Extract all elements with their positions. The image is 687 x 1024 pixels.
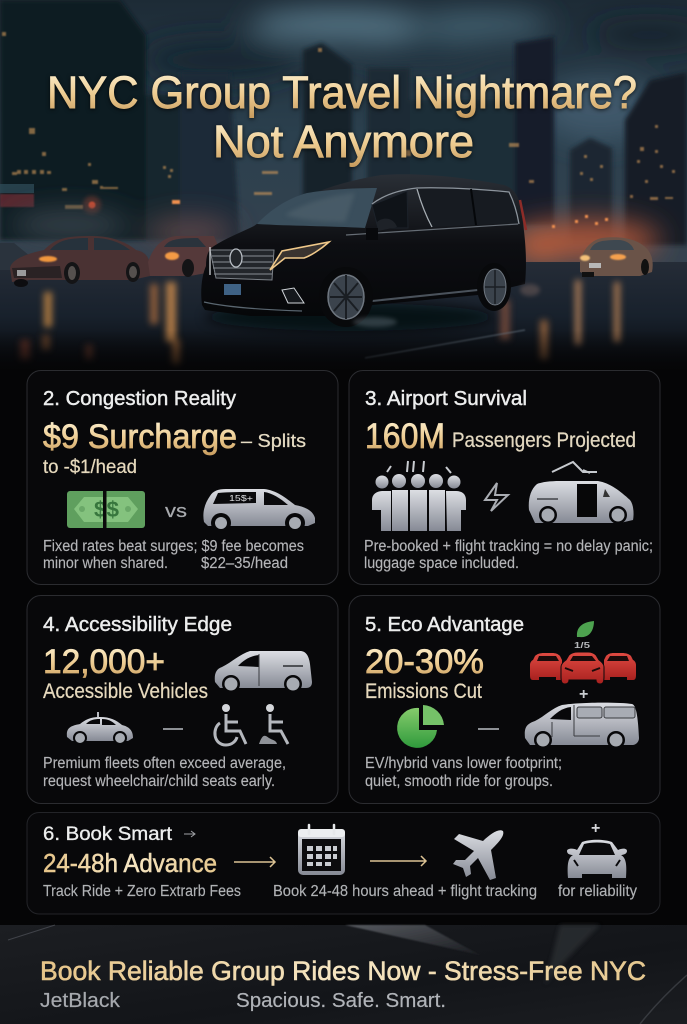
icon: passenger van xyxy=(525,703,639,749)
icon: van with open door and luggage xyxy=(529,462,634,524)
panel: congestion reality xyxy=(27,370,338,584)
heading: eco advantage: 5. Eco Advantage xyxy=(365,614,524,636)
background car: second sedan xyxy=(148,236,220,277)
icon: airplane xyxy=(453,830,503,880)
panel: eco advantage xyxy=(349,596,660,804)
panel: book smart xyxy=(27,812,660,914)
brand: JetBlack: JetBlack xyxy=(40,990,121,1012)
icon: calendar xyxy=(298,825,345,875)
body text: airport xyxy=(364,538,653,572)
plus sign: + xyxy=(591,820,600,837)
stat: $9 surcharge: to -$1/head xyxy=(43,456,137,478)
icon: group van xyxy=(203,489,315,533)
hero photo: rainy city street with black van xyxy=(0,0,687,376)
icon: taxi car xyxy=(67,712,133,745)
heading: congestion reality: 2. Congestion Reality xyxy=(43,388,236,410)
stat: 20-30% emissions cut: Emissions Cut xyxy=(365,680,482,703)
caption: flight tracking: Book 24-48 hours ahead + flight tracking xyxy=(273,883,537,900)
stat: $9 surcharge: $9 Surcharge xyxy=(43,418,237,456)
icon: dollar bill xyxy=(67,491,145,528)
call to action: Book Reliable Group Rides Now - Stress-Free NYC xyxy=(40,956,646,986)
body text: accessibility xyxy=(43,755,286,790)
heading: accessibility edge: 4. Accessibility Edge xyxy=(43,614,232,636)
stat: 20-30% emissions cut xyxy=(365,643,484,703)
stat: 12,000+ accessible vehicles xyxy=(43,643,208,703)
body text: airport: luggage space included. xyxy=(364,555,519,572)
label: 1/5: 1/5 xyxy=(574,641,591,650)
body text: congestion: minor when shared. xyxy=(43,555,168,572)
dash xyxy=(478,728,499,730)
caption: track ride: Track Ride + Zero Extrarb Fees xyxy=(43,883,241,900)
icon: child seat wheelchair xyxy=(259,704,288,744)
caption: for reliability: for reliability xyxy=(558,883,637,900)
dash xyxy=(163,728,183,730)
title xyxy=(47,67,637,167)
icon: leaf xyxy=(577,621,594,637)
stat: $9 surcharge: – Splits xyxy=(241,430,306,451)
arrow to calendar xyxy=(234,857,275,867)
panel: accessibility edge xyxy=(27,596,338,804)
body text: accessibility: Premium fleets often exceed average, xyxy=(43,755,286,772)
stat: 12,000+ accessible vehicles: 12,000+ xyxy=(43,643,165,681)
stat: 160M passengers xyxy=(365,417,636,456)
icon: lightning bolt xyxy=(485,483,508,511)
body text: congestion: Fixed rates beat surges; $9 fee becomes xyxy=(43,538,304,555)
stat: 24-48h advance: 24-48h Advance xyxy=(43,848,217,878)
icon: dollar bill: $$ xyxy=(94,497,119,522)
title: Not Anymore xyxy=(213,116,474,167)
background car left edge xyxy=(0,243,30,270)
body text: eco xyxy=(365,755,562,790)
panel: airport survival xyxy=(349,370,660,584)
icon: cargo van xyxy=(215,651,312,693)
heading: book smart: 6. Book Smart xyxy=(43,823,173,845)
body text: eco: quiet, smooth ride for groups. xyxy=(365,773,553,790)
small arrow xyxy=(184,831,195,837)
stat: $9 surcharge xyxy=(43,418,306,478)
body text: accessibility: request wheelchair/child seats early. xyxy=(43,773,275,790)
stat: 12,000+ accessible vehicles: Accessible Vehicles xyxy=(43,680,208,703)
body text: airport: Pre-booked + flight tracking = no delay panic; xyxy=(364,538,653,555)
body text: eco: EV/hybrid vans lower footprint; xyxy=(365,755,562,772)
stat: 160M passengers: 160M xyxy=(365,417,445,456)
icon: car front xyxy=(567,840,627,878)
body text: congestion: $22–35/head xyxy=(201,555,288,572)
title: NYC Group Travel Nightmare? xyxy=(47,67,637,118)
heading: airport survival: 3. Airport Survival xyxy=(365,388,527,410)
background car: right sedan xyxy=(580,237,653,277)
plus sign: + xyxy=(579,686,588,703)
arrow to plane xyxy=(370,856,426,866)
body text: congestion xyxy=(43,538,304,572)
footer band xyxy=(0,925,687,1024)
stat: 20-30% emissions cut: 20-30% xyxy=(365,643,484,681)
stat: 160M passengers: Passengers Projected xyxy=(452,429,636,452)
label: vs: vs xyxy=(165,501,187,521)
background car: brown sedan xyxy=(10,236,150,287)
icon: pie chart xyxy=(397,705,444,748)
hero van: black passenger van xyxy=(201,174,540,331)
icon: group van: 15$+ xyxy=(229,494,253,503)
icon: stressed crowd xyxy=(372,461,466,531)
icon: three red cars xyxy=(530,652,636,684)
tagline: Spacious. Safe. Smart. xyxy=(236,990,446,1012)
icon: wheelchair xyxy=(215,704,246,745)
